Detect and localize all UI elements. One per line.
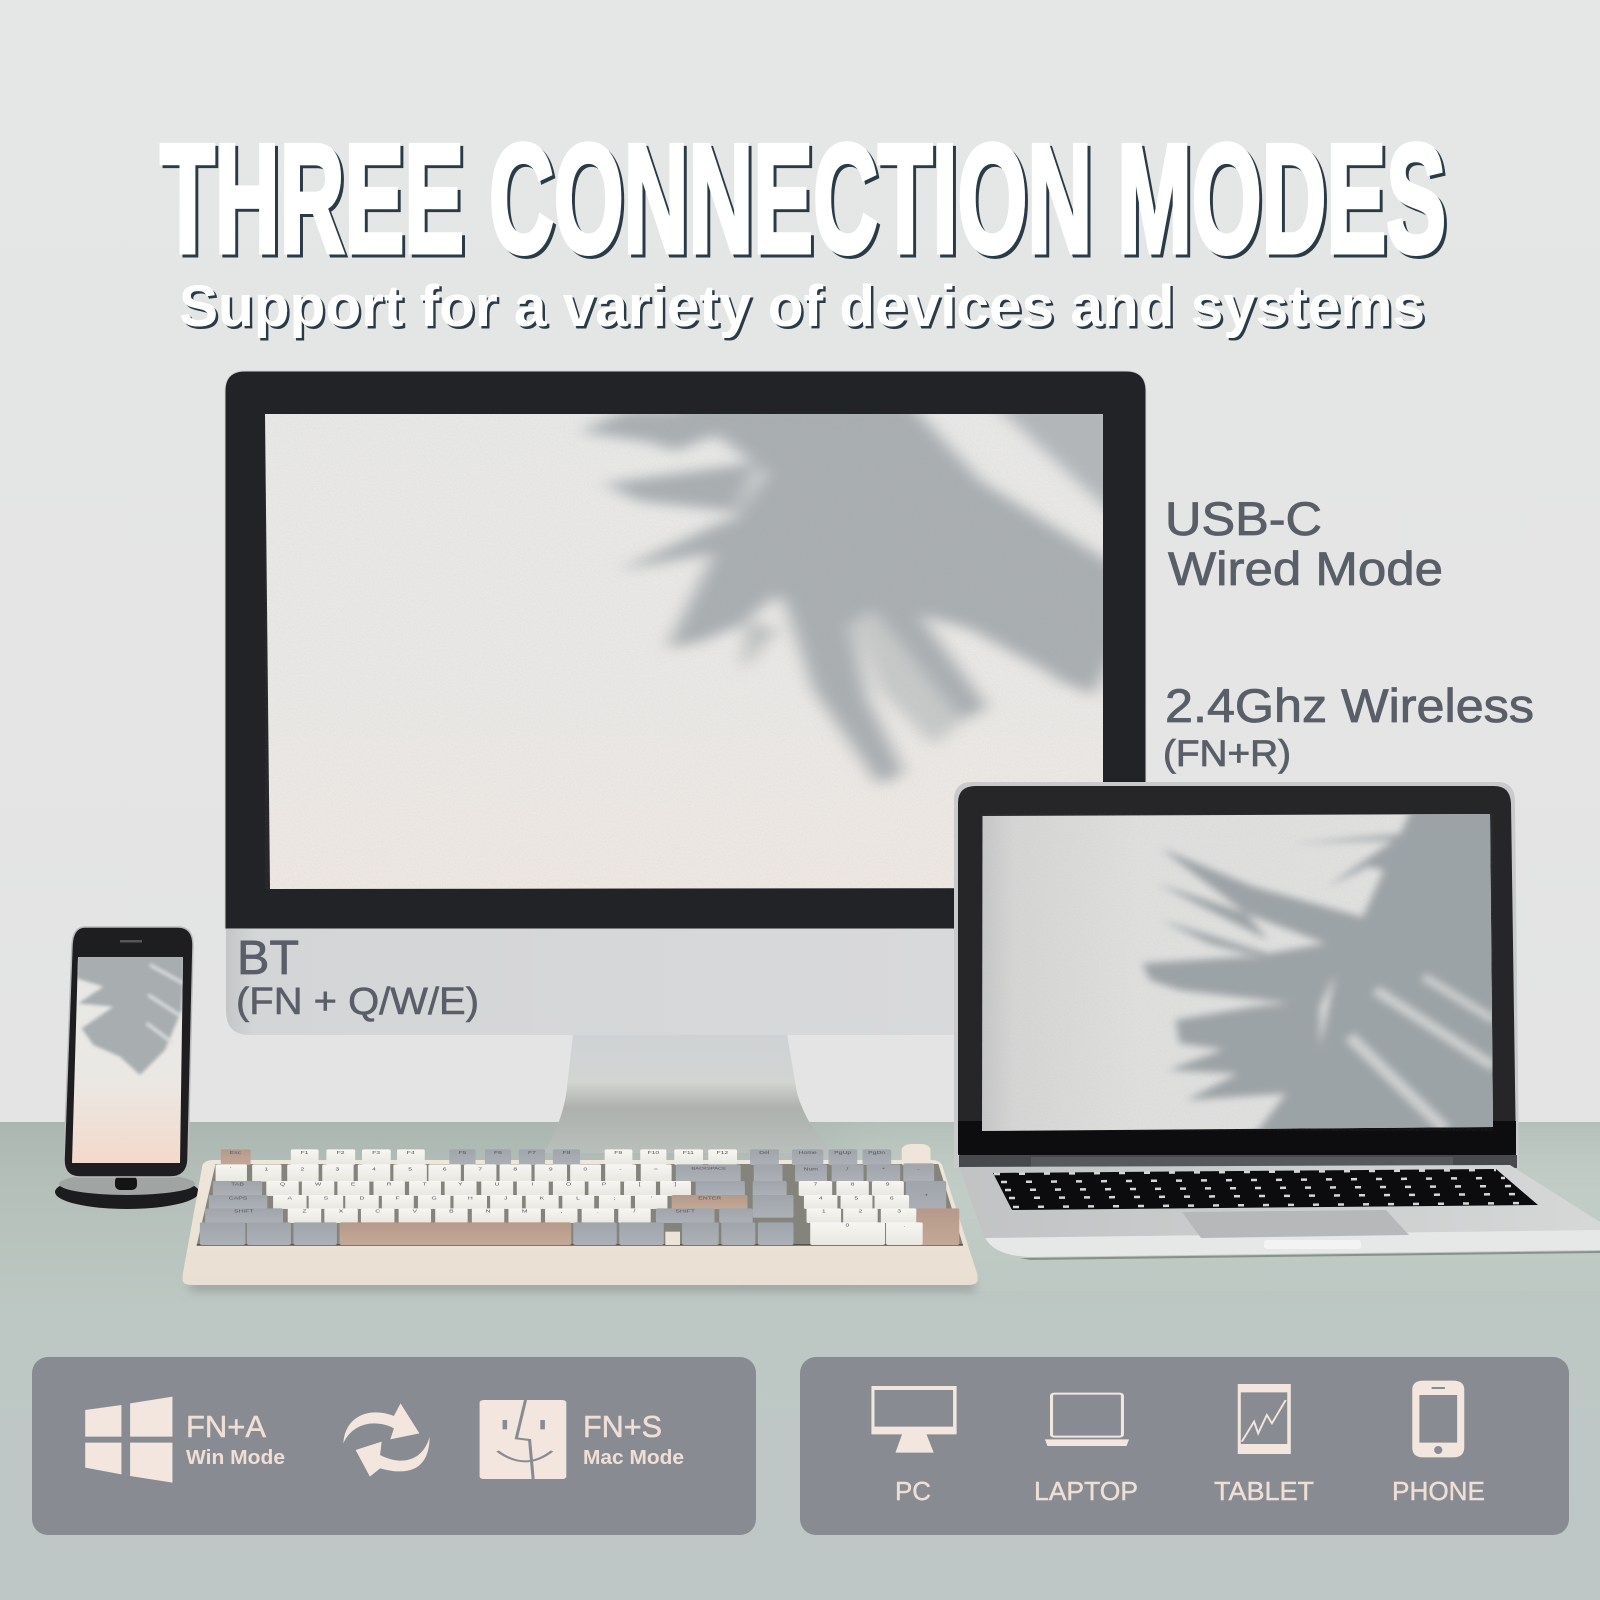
key legends: ENTER: [698, 1196, 721, 1201]
key legends: PgDn: [868, 1151, 885, 1156]
phone palm shadow: [77, 955, 185, 1075]
key legends: 789: [814, 1183, 890, 1187]
keyboard shadow: [190, 1282, 975, 1290]
key legends: F4: [407, 1151, 415, 1156]
key legends: F10: [647, 1151, 659, 1156]
phone screen: [72, 957, 183, 1163]
key legends: /: [846, 1168, 849, 1172]
key legends: F3: [372, 1151, 380, 1156]
key legends: *: [882, 1168, 886, 1172]
monitor chin: [226, 929, 1146, 1035]
laptop screen: [982, 814, 1493, 1131]
desk surface: [0, 1060, 1600, 1600]
key legends: F9: [614, 1151, 622, 1156]
panel: OS modes: [32, 1357, 756, 1535]
monitor stand: [543, 1034, 832, 1153]
key legends: ASDFGHJKL;': [288, 1196, 652, 1201]
monitor palm shadow: [580, 403, 1119, 785]
volume knob: [902, 1144, 931, 1168]
label: BT: (FN + Q/W/E): [236, 981, 479, 1023]
laptop trackpad: [1182, 1210, 1409, 1238]
key legends: +: [924, 1194, 929, 1198]
label: BT: BT: [237, 932, 299, 985]
key legends: F5: [458, 1151, 466, 1156]
text: FN+S mac mode: [583, 1409, 684, 1469]
text: FN+S mac mode: FN+S: [583, 1409, 662, 1444]
icon: finder: [480, 1400, 566, 1479]
label: USB-C wired mode: Wired Mode: [1168, 542, 1443, 595]
key legends: 0: [845, 1224, 849, 1228]
key legends: F11: [683, 1151, 694, 1156]
text: FN+S mac mode: Mac Mode: [583, 1447, 684, 1469]
key legends: 123: [822, 1210, 901, 1214]
icon: phone: [1412, 1381, 1464, 1457]
key legends: F7: [528, 1151, 536, 1156]
label: 2.4Ghz wireless: 2.4Ghz Wireless: [1165, 679, 1534, 732]
icon: switch arrows: [343, 1403, 430, 1477]
keyboard well: [197, 1164, 963, 1245]
laptop palm shadow: [1142, 807, 1501, 1137]
text: FN+A win mode: [186, 1409, 285, 1469]
monitor bezel: [225, 371, 1146, 929]
key legends: ZXCVBNM,./: [302, 1210, 636, 1214]
text: FN+A win mode: FN+A: [186, 1409, 266, 1444]
device labels: TABLET: [1214, 1476, 1314, 1506]
laptop screen texture: [982, 814, 1493, 1131]
icon: tablet: [1238, 1384, 1291, 1454]
keyboard case: [183, 1160, 978, 1285]
monitor screen texture: [265, 414, 1103, 889]
device labels: [895, 1476, 1485, 1506]
key legends: F12: [716, 1151, 728, 1156]
device labels: PHONE: [1392, 1476, 1485, 1506]
key legends: SHIFT: [234, 1210, 254, 1214]
key legends: CAPS: [229, 1196, 248, 1201]
key legends: `1234567890-=: [230, 1168, 659, 1172]
key row: space bar: [200, 1222, 923, 1245]
key legends: F8: [563, 1151, 570, 1156]
phone stand: [55, 1173, 199, 1209]
label: USB-C wired mode: [1165, 492, 1443, 595]
label: 2.4Ghz wireless: [1163, 679, 1534, 774]
laptop shadow: [1020, 1251, 1600, 1260]
phone speaker: [120, 940, 142, 942]
laptop hinge: [959, 1155, 1517, 1169]
icon: laptop: [1045, 1394, 1129, 1446]
key legends: F2: [337, 1151, 345, 1156]
monitor: [225, 371, 1146, 1153]
key legends: 456: [819, 1196, 894, 1201]
key legends: .: [903, 1224, 906, 1228]
text: FN+A win mode: Win Mode: [186, 1447, 285, 1469]
laptop lid: [954, 782, 1519, 1168]
panel: devices: [800, 1357, 1569, 1535]
phone body: [64, 927, 193, 1177]
icon: PC: [871, 1386, 957, 1453]
key legends: QWERTYUIOP[]: [280, 1183, 677, 1187]
key legends: F6: [494, 1151, 502, 1156]
laptop front lip: [985, 1230, 1600, 1257]
key row: QWERTY: [213, 1181, 946, 1217]
icon: windows: [85, 1397, 172, 1483]
key legends: PgUp: [834, 1151, 851, 1156]
laptop base: [959, 1165, 1600, 1257]
key row: ZXCV: [205, 1208, 959, 1245]
subtitle: Support for a variety of devices and systems: [179, 274, 1425, 339]
key legends: [229, 1151, 929, 1228]
key legends: -: [917, 1168, 920, 1172]
laptop: [954, 782, 1600, 1260]
phone on stand: [55, 927, 199, 1209]
key row: numbers: [216, 1163, 934, 1218]
key legends: Esc: [230, 1151, 241, 1156]
laptop keyboard: [993, 1169, 1538, 1210]
key legends: TAB: [231, 1183, 244, 1187]
label: 2.4Ghz wireless: (FN+R): [1163, 733, 1291, 774]
key legends: Del: [759, 1151, 769, 1156]
device labels: LAPTOP: [1034, 1476, 1138, 1506]
monitor screen: [265, 414, 1103, 889]
key row: function: [221, 1144, 931, 1168]
key legends: BACKSPACE: [691, 1166, 726, 1171]
key row: ASDF: [209, 1195, 909, 1209]
label: USB-C wired mode: USB-C: [1165, 492, 1322, 545]
label: BT: [236, 932, 479, 1023]
key legends: Home: [799, 1151, 817, 1156]
key legends: Num: [804, 1168, 818, 1172]
key legends: F1: [301, 1151, 308, 1156]
background wall: [0, 0, 1600, 1122]
keyboard: [183, 1144, 978, 1290]
key legends: SHIFT: [675, 1210, 696, 1214]
device labels: PC: [895, 1476, 931, 1506]
